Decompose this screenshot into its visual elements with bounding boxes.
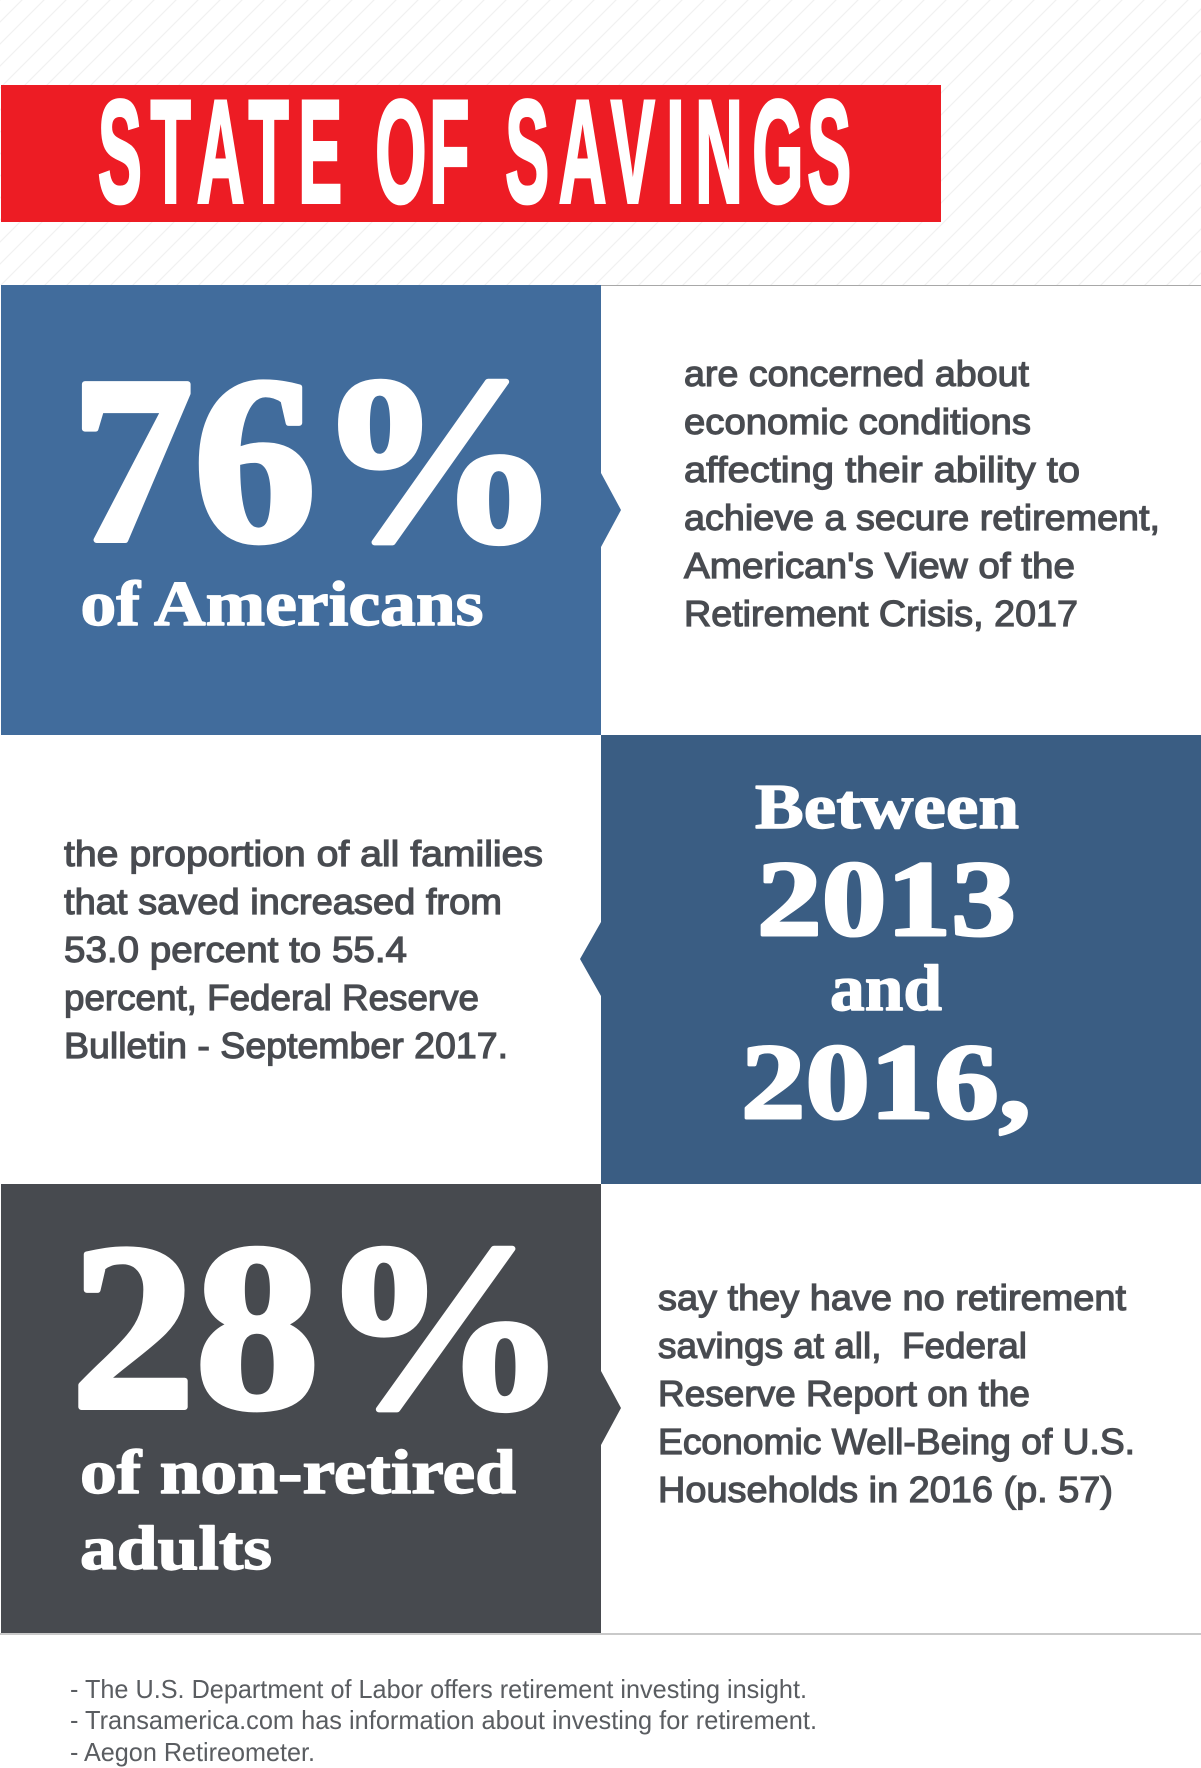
text block: no retirement savings: savings at all, Federal	[658, 1325, 1027, 1366]
footer notes: - Transamerica.com has information about investing for retirement.	[70, 1705, 817, 1735]
footer notes: - Aegon Retireometer.	[70, 1737, 315, 1767]
text block: concerned about economic conditions: affecting their ability to	[684, 449, 1080, 490]
label: of Americans: of Americans	[80, 568, 484, 639]
text block: proportion of families that saved: 53.0 percent to 55.4	[64, 929, 407, 970]
footer notes: - The U.S. Department of Labor offers retirement investing insight.	[70, 1674, 807, 1704]
label: adults: adults	[80, 1515, 272, 1583]
text block: concerned about economic conditions: are concerned about	[684, 353, 1029, 394]
text block: no retirement savings: Reserve Report on the	[658, 1373, 1030, 1414]
text block: concerned about economic conditions: American's View of the	[684, 545, 1075, 586]
year: 2016: 2016,	[741, 1023, 1031, 1142]
label: and: and	[830, 952, 942, 1025]
panel: between 2013 and 2016	[580, 735, 1201, 1184]
text block: proportion of families that saved: that saved increased from	[64, 881, 502, 922]
text block: no retirement savings: say they have no retirement	[658, 1277, 1126, 1318]
big stat: 28%: 28%	[71, 1196, 568, 1459]
text block: no retirement savings	[658, 1277, 1135, 1510]
text block: concerned about economic conditions: achieve a secure retirement,	[684, 497, 1160, 538]
label: Between: Between	[755, 771, 1019, 842]
text block: proportion of families that saved: Bulletin - September 2017.	[64, 1025, 508, 1066]
year: 2013: 2013	[757, 840, 1016, 959]
text block: no retirement savings: Households in 2016 (p. 57)	[658, 1469, 1113, 1510]
text block: proportion of families that saved	[64, 833, 543, 1066]
text block: concerned about economic conditions	[684, 353, 1160, 634]
label: of non-retired: of non-retired	[80, 1439, 516, 1507]
panel: 28% of non-retired adults	[1, 1184, 621, 1633]
footer notes	[70, 1674, 817, 1767]
title banner	[1, 70, 941, 233]
title: STATE OF SAVINGS	[98, 70, 851, 233]
text block: proportion of families that saved: the proportion of all families	[64, 833, 543, 874]
text block: concerned about economic conditions: Retirement Crisis, 2017	[684, 593, 1078, 634]
text block: concerned about economic conditions: economic conditions	[684, 401, 1031, 442]
panel: 76% of Americans	[1, 285, 621, 735]
text block: no retirement savings: Economic Well-Being of U.S.	[658, 1421, 1135, 1462]
big stat: 76%: 76%	[71, 329, 561, 592]
text block: proportion of families that saved: percent, Federal Reserve	[64, 977, 479, 1018]
